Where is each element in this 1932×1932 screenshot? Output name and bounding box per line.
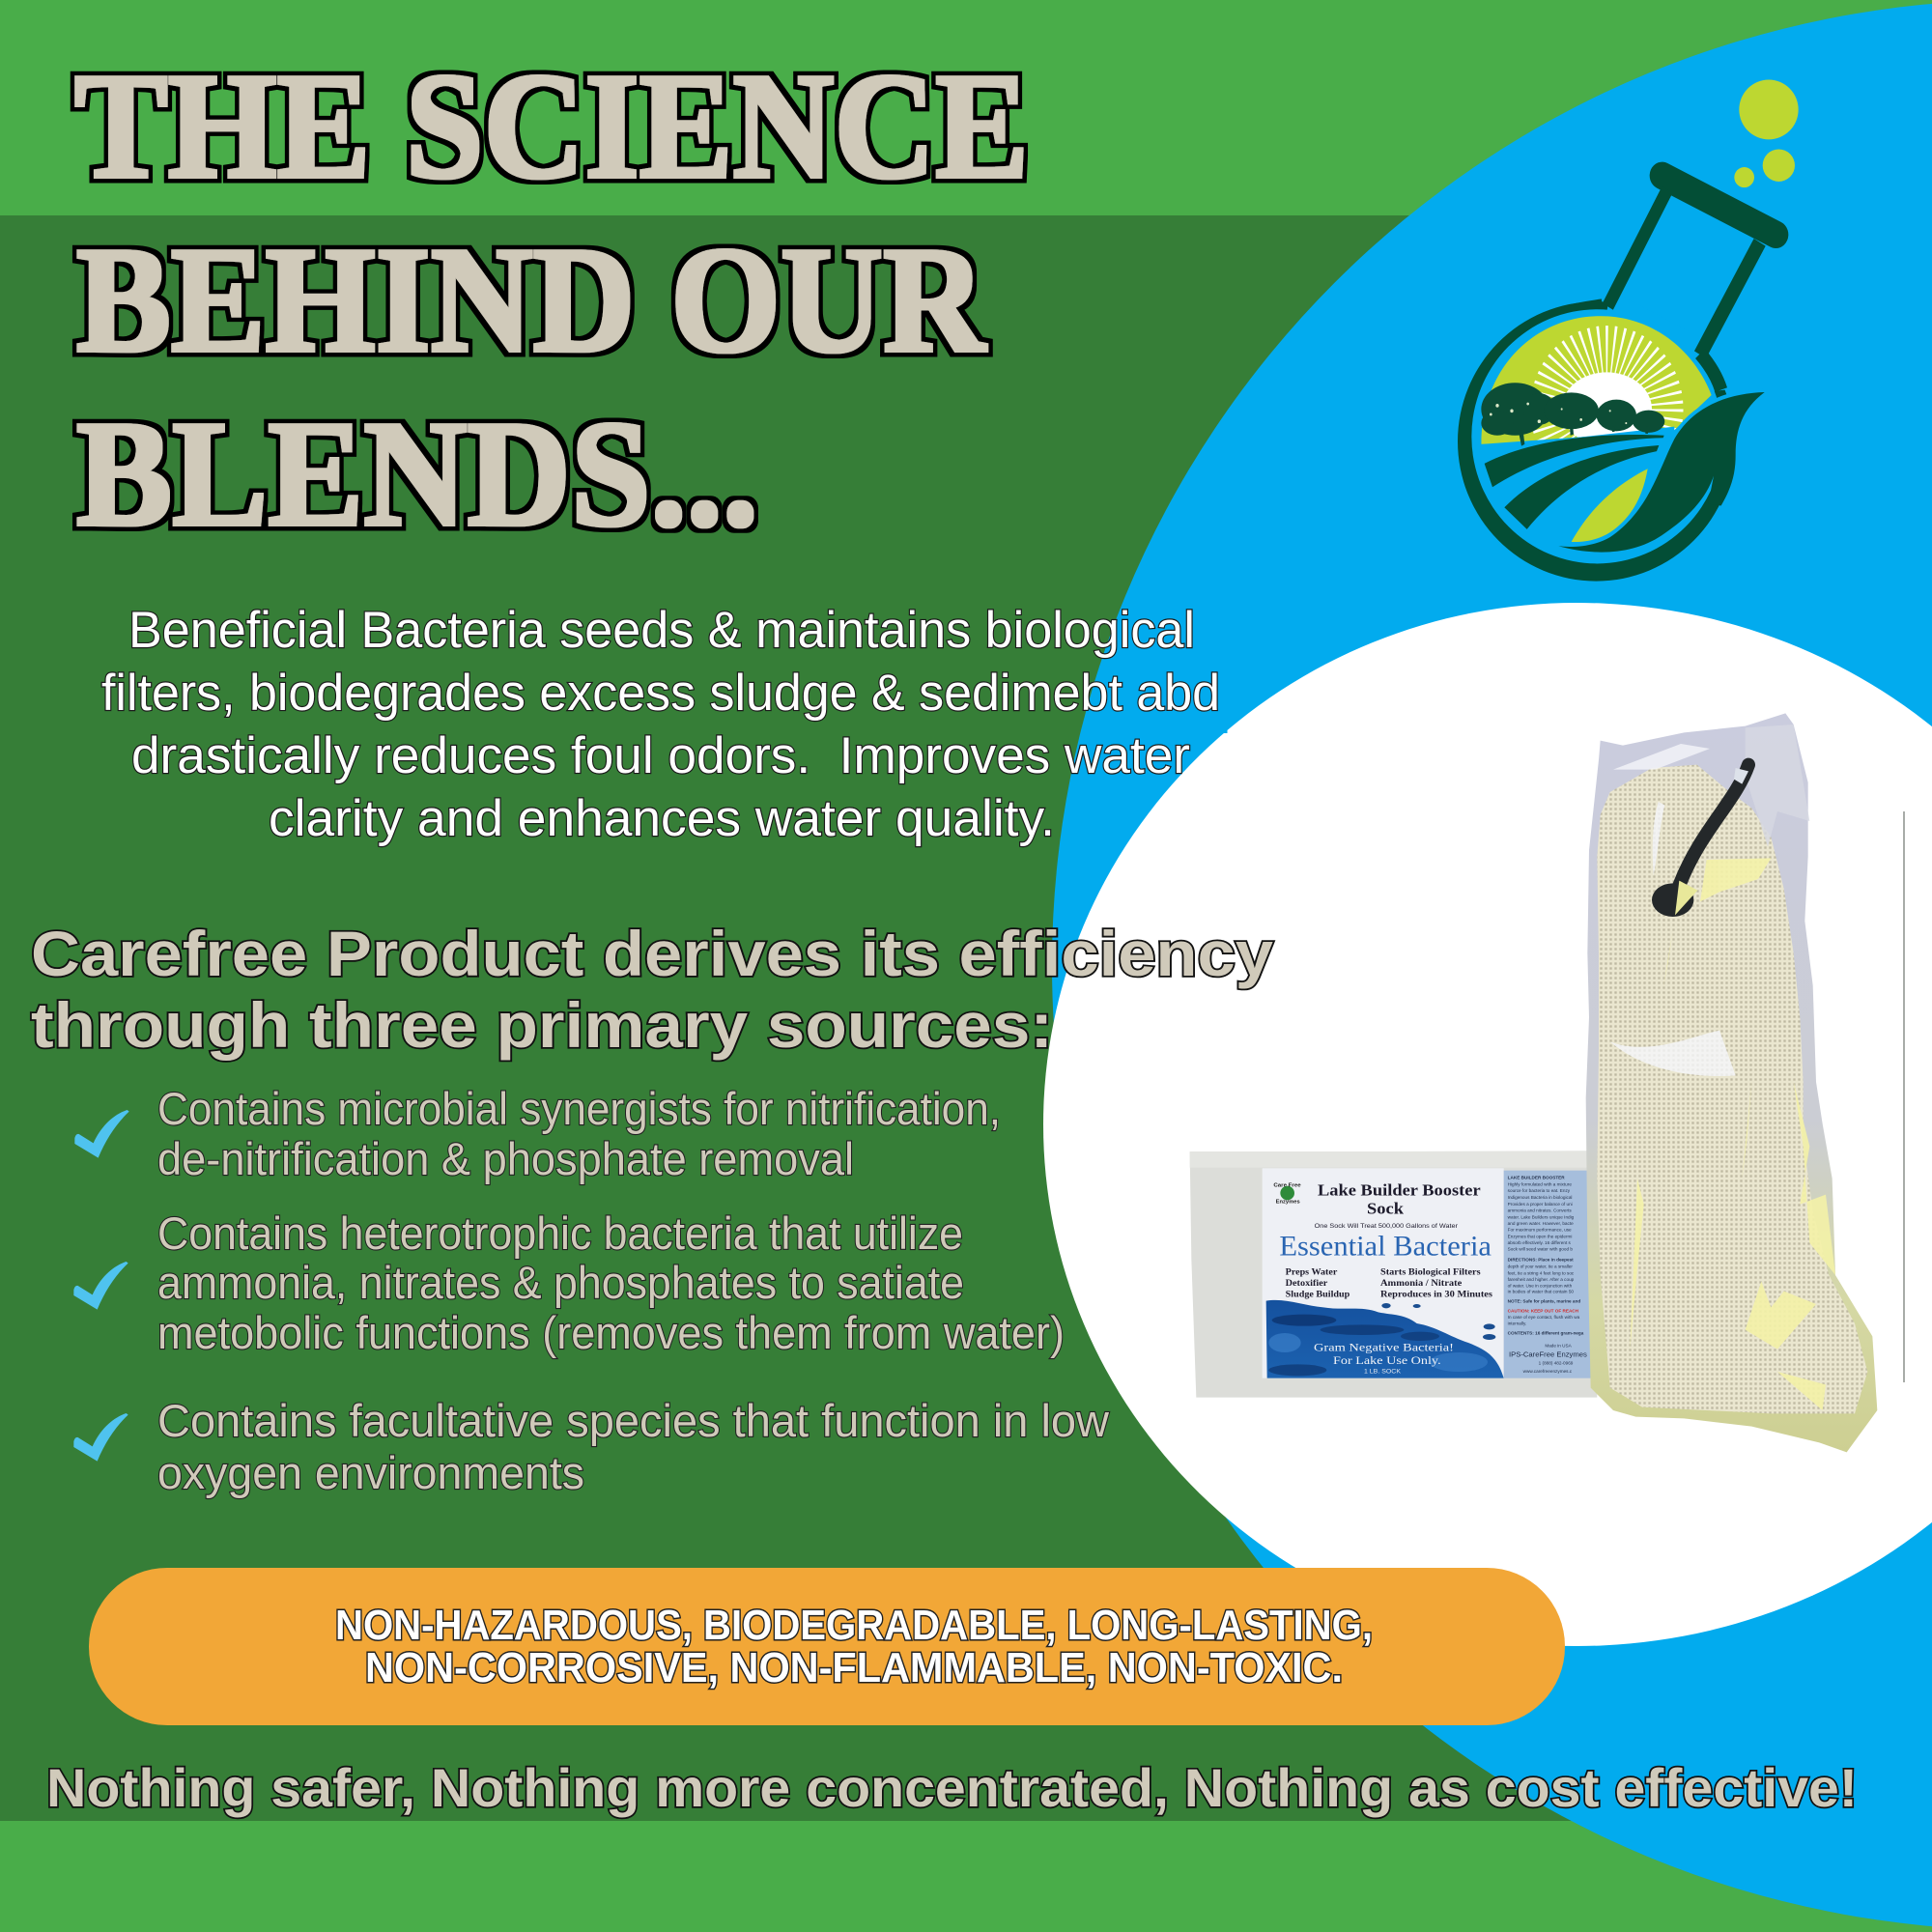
- side label text: [1508, 1176, 1587, 1374]
- intro paragraph: Beneficial Bacteria seeds & maintains biological: [128, 602, 1195, 659]
- sun dome: [1481, 316, 1712, 444]
- side label text: NOTE: Safe for plants, marine and: [1508, 1298, 1580, 1303]
- sky under horizon: [1480, 427, 1674, 472]
- care free logo: Enzymes: [1276, 1200, 1300, 1206]
- label text: One Sock Will Treat 500,000 Gallons of Water: [1315, 1223, 1459, 1230]
- item 1: [157, 1083, 1001, 1184]
- side label text: LAKE BUILDER BOOSTER: [1508, 1176, 1565, 1180]
- background: white circle: [1043, 603, 1932, 1646]
- label text: Sock: [1367, 1200, 1405, 1218]
- trees: [1481, 383, 1664, 446]
- callout: orange pill: [89, 1568, 1565, 1725]
- plastic fold: [1746, 724, 1809, 847]
- side label text: depth of your water, tie a smaller: [1508, 1264, 1573, 1269]
- side label text: CAUTION: KEEP OUT OF REACH: [1508, 1308, 1579, 1313]
- box top shading: [1190, 1151, 1596, 1168]
- bag glint: [1675, 881, 1697, 915]
- item 3: [157, 1395, 1110, 1498]
- intro paragraph: filters, biodegrades excess sludge & sedimebt abd: [101, 665, 1220, 722]
- label text: Ammonia / Nitrate: [1380, 1278, 1463, 1289]
- side label text: ammonia and nitrates. Converts: [1508, 1208, 1572, 1213]
- label text: Lake Builder Booster: [1318, 1181, 1481, 1200]
- subheading: [31, 918, 1273, 1061]
- item 2: ammonia, nitrates & phosphates to satiate: [157, 1257, 964, 1308]
- side label text: IPS-CareFree Enzymes: [1509, 1350, 1587, 1359]
- drawstring knot: [1679, 765, 1748, 886]
- label text: Preps Water: [1286, 1267, 1338, 1278]
- subheading: Carefree Product derives its efficiency: [31, 918, 1273, 989]
- side label text: water. Lake Builders unique Indig: [1508, 1214, 1575, 1219]
- side label text: of water. Use in conjunction with: [1508, 1283, 1573, 1288]
- side label text: DIRECTIONS: Place in deepest: [1508, 1257, 1574, 1262]
- title: [74, 42, 1029, 557]
- callout: orange pill: NON-HAZARDOUS, BIODEGRADABLE, LONG-LASTING,: [335, 1602, 1373, 1649]
- side label text: source for bacteria to eat. Enzy: [1508, 1188, 1571, 1193]
- flask neck: [1562, 176, 1776, 390]
- water text: 1 LB. SOCK: [1364, 1370, 1401, 1376]
- mesh sock: [1597, 765, 1867, 1413]
- item 2: metobolic functions (removes them from water): [157, 1307, 1065, 1358]
- product: mesh sock in plastic bag: [1586, 713, 1877, 1452]
- background: blue circle: [1052, 0, 1932, 1930]
- side label text: Made in USA: [1545, 1343, 1573, 1348]
- label text: Detoxifier: [1286, 1278, 1328, 1289]
- bubbles: [1734, 80, 1799, 187]
- item 1: de-nitrification & phosphate removal: [157, 1133, 854, 1184]
- water droplets: [1381, 1303, 1495, 1340]
- product: box of Essential Bacteria: [1190, 1151, 1597, 1398]
- title line 3: BLENDS...: [76, 389, 758, 557]
- intro paragraph: clarity and enhances water quality.: [269, 790, 1055, 847]
- plastic highlights: [1630, 858, 1835, 1410]
- label text: Essential Bacteria: [1279, 1231, 1492, 1262]
- side label text: Sock will seed water with good b: [1508, 1247, 1573, 1252]
- side label text: Highly formulated with a mixture: [1508, 1181, 1572, 1186]
- thin grey line: [1903, 811, 1905, 1382]
- side label: [1504, 1171, 1596, 1378]
- water text: Gram Negative Bacteria!: [1314, 1341, 1454, 1354]
- side label text: 1 (888) 482-0969: [1539, 1361, 1574, 1366]
- intro paragraph: [101, 602, 1220, 847]
- big leaf: [1558, 392, 1765, 553]
- care free logo: [1273, 1183, 1301, 1206]
- small leaf: [1572, 469, 1648, 542]
- white glare: [1610, 744, 1736, 1076]
- list: three sources: [73, 1083, 1110, 1498]
- leaf gap: [1647, 392, 1765, 500]
- front label: [1263, 1168, 1504, 1378]
- side label text: farenheit and higher. After a coup: [1508, 1277, 1575, 1282]
- label text: Starts Biological Filters: [1380, 1267, 1481, 1278]
- side label text: and green water. However, bacte: [1508, 1221, 1574, 1226]
- icon: check 1: [74, 1110, 129, 1158]
- side label text: Enzymes that open the epidermi: [1508, 1234, 1572, 1238]
- side label text: In case of eye contact, flush with wa: [1508, 1315, 1580, 1320]
- subheading: through three primary sources:: [31, 989, 1053, 1061]
- label text: [1279, 1181, 1492, 1299]
- side label text: feet, tie a string 4 feet long to soc: [1508, 1270, 1575, 1275]
- side label text: Provides a proper balance of uni: [1508, 1202, 1573, 1207]
- item 3: Contains facultative species that function in low: [157, 1395, 1110, 1446]
- care free logo: Care Free: [1273, 1183, 1301, 1189]
- drawstring glint: [1734, 768, 1748, 784]
- icon: flask logo: [1458, 80, 1799, 582]
- title line 1: THE SCIENCE: [74, 42, 1029, 210]
- side label text: absorb effectively. 16 different s: [1508, 1240, 1572, 1245]
- label text: Sludge Buildup: [1286, 1289, 1350, 1299]
- neck opening: [1606, 290, 1726, 391]
- callout: orange pill: NON-CORROSIVE, NON-FLAMMABLE, NON-TOXIC.: [365, 1644, 1343, 1691]
- icon: check 3: [73, 1413, 128, 1462]
- flask ring: [1458, 301, 1735, 582]
- side label text: For maximum performance, use: [1508, 1228, 1572, 1233]
- field bands: [1485, 435, 1664, 529]
- box body: [1190, 1151, 1597, 1398]
- side label text: Indigenous Bacteria in biological: [1508, 1195, 1572, 1200]
- water text: [1314, 1341, 1454, 1376]
- side label text: www.carefreeenzymes.c: [1523, 1369, 1573, 1374]
- label text: Reproduces in 30 Minutes: [1380, 1289, 1492, 1299]
- footer tagline: Nothing safer, Nothing more concentrated, Nothing as cost effective!: [46, 1757, 1858, 1818]
- water splash: [1266, 1300, 1504, 1378]
- drawstring ball: [1652, 883, 1693, 917]
- water text: For Lake Use Only.: [1333, 1353, 1441, 1367]
- intro paragraph: drastically reduces foul odors. Improves water: [131, 727, 1190, 784]
- side label text: internally.: [1508, 1321, 1526, 1325]
- icon: check 2: [73, 1262, 128, 1310]
- item 1: Contains microbial synergists for nitrification,: [157, 1083, 1001, 1134]
- item 2: [157, 1208, 1065, 1358]
- title line 2: BEHIND OUR: [76, 215, 987, 384]
- plastic bag: [1586, 713, 1877, 1452]
- item 3: oxygen environments: [157, 1447, 584, 1498]
- item 2: Contains heterotrophic bacteria that utilize: [157, 1208, 963, 1259]
- side label text: in bodies of water that contain 50: [1508, 1290, 1574, 1294]
- tree highlights: [1490, 403, 1627, 424]
- side label text: CONTENTS: 16 different gram-nega: [1508, 1330, 1584, 1335]
